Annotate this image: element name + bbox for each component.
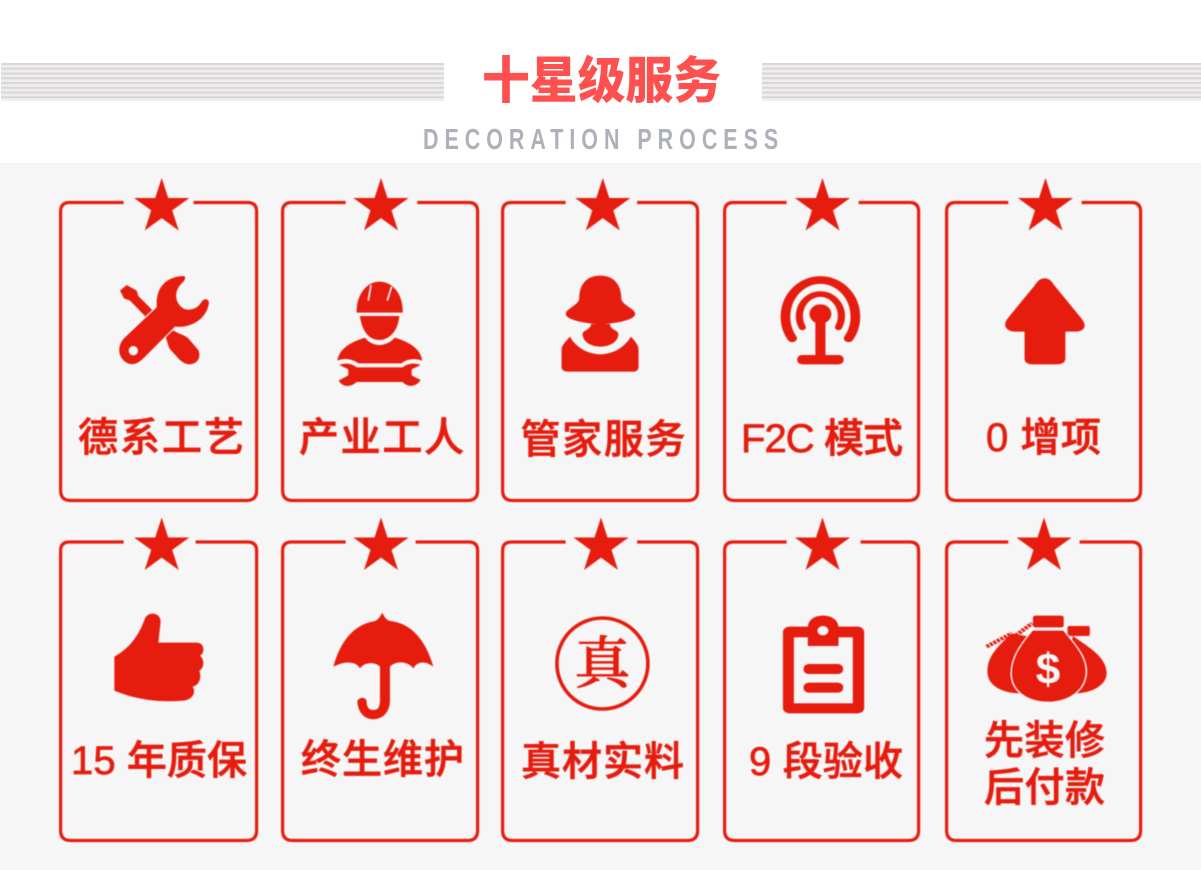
icon: star: [573, 518, 629, 570]
icon: star: [795, 178, 850, 230]
icon: star: [1018, 178, 1073, 230]
label: line 2: 后付款: [984, 766, 1105, 810]
icon: star: [795, 518, 850, 570]
card frame: [283, 542, 478, 840]
icon: wrench and screwdriver: [119, 276, 209, 364]
card: 管家服务: [503, 178, 698, 500]
label: 9 段验收: [749, 740, 903, 784]
icon: signal antenna: [785, 280, 855, 364]
label: 0 增项: [986, 416, 1101, 460]
icon: thumbs up: [114, 614, 203, 701]
icon: star: [134, 178, 189, 230]
card: 德系工艺: [61, 178, 257, 500]
card: 9 段验收: [725, 518, 919, 840]
card frame: [947, 202, 1141, 500]
icon: up arrow: [1005, 278, 1085, 364]
icon: star: [1016, 518, 1072, 570]
icon: star: [575, 178, 630, 230]
label: 产业工人: [299, 416, 464, 460]
card frame: [61, 542, 257, 840]
label: 管家服务: [520, 418, 686, 462]
icon: stamp 真: 真: [574, 634, 634, 696]
label: 15 年质保: [71, 739, 247, 783]
icon: umbrella: [333, 613, 433, 719]
subtitle: DECORATION PROCESS: [423, 124, 778, 156]
right stripe band: [762, 63, 1201, 101]
card: F2C 模式: [725, 178, 919, 500]
card frame: [61, 202, 257, 500]
label: 终生维护: [301, 738, 464, 782]
icon: star: [353, 178, 409, 230]
icon: housekeeper: [562, 276, 639, 372]
label: 德系工艺: [78, 416, 244, 460]
card frame: [725, 202, 919, 500]
icon: star: [134, 518, 189, 570]
icon: worker with helmet: [337, 282, 422, 386]
card: 0 增项: [947, 178, 1141, 500]
card frame: [725, 542, 919, 840]
icon: clipboard: [783, 616, 864, 713]
icon: star: [353, 518, 409, 570]
label: 真材实料: [521, 740, 684, 784]
card frame: [503, 202, 698, 500]
card: 先装修后付款: [947, 518, 1141, 840]
title: 十星级服务: [482, 53, 721, 109]
card: 产业工人: [283, 178, 478, 500]
card: 15 年质保: [61, 518, 257, 840]
left stripe band: [1, 63, 444, 101]
card frame: [947, 542, 1141, 840]
icon: stamp 真: [557, 618, 648, 709]
card: 终生维护: [283, 518, 478, 840]
icon: money bags: $: [1036, 645, 1060, 694]
card frame: [283, 202, 478, 500]
icon: money bags: [987, 616, 1107, 702]
label: line 1: 先装修: [984, 719, 1105, 763]
label: F2C 模式: [741, 417, 903, 461]
card frame: [503, 542, 698, 840]
card: 真材实料: [503, 518, 698, 840]
